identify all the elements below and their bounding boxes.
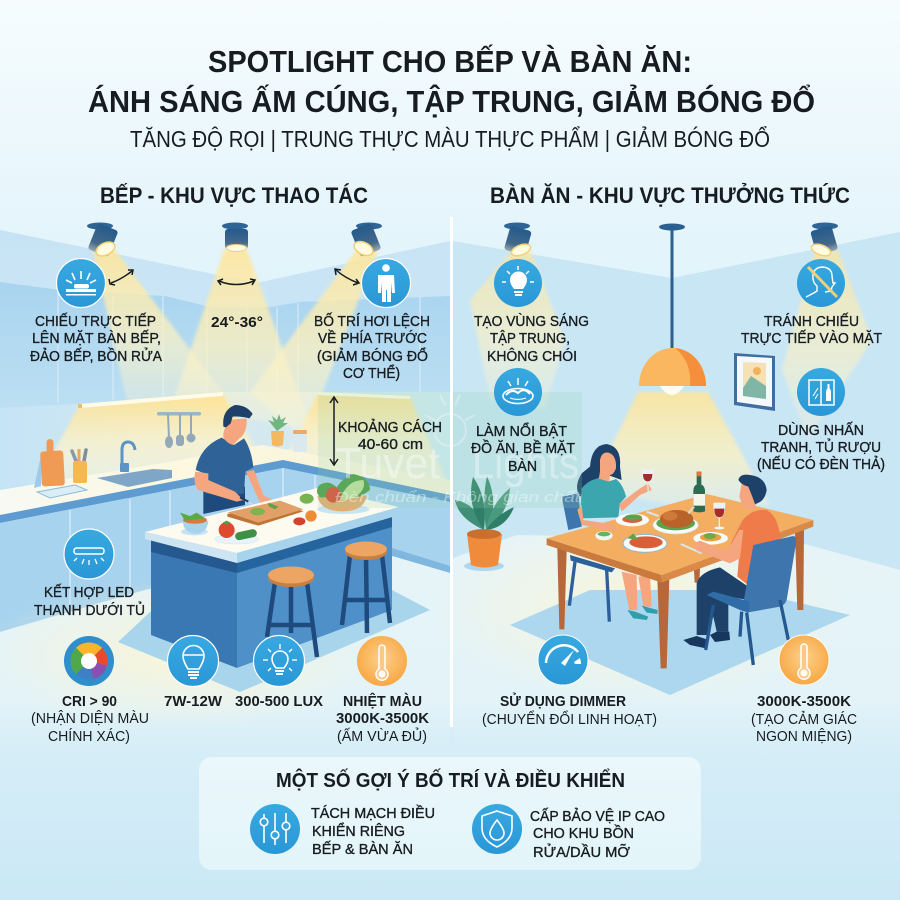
woman torso — [580, 478, 626, 518]
icon: wine cabinet — [797, 368, 845, 416]
man chair — [706, 536, 796, 665]
title — [88, 44, 815, 119]
back counter — [0, 445, 450, 632]
beam: right spot — [782, 250, 872, 440]
label: focused zone: KHÔNG CHÓI — [487, 348, 577, 365]
LED strip glow — [33, 394, 450, 490]
spotlight: kitchen center — [222, 222, 248, 252]
label: offset placement: BỐ TRÍ HƠI LỆCH — [314, 312, 430, 330]
label: colour temperature kitchen: NHIỆT MÀU — [343, 692, 422, 710]
watermark: Đèn chuẩn - Không gian chất — [335, 489, 581, 506]
man — [683, 475, 796, 665]
illustration: kitchen island rug — [118, 590, 430, 692]
sink and faucet — [97, 442, 172, 487]
plate with tomato and cucumber — [215, 534, 259, 544]
label: dimmer: SỬ DỤNG DIMMER — [500, 692, 626, 710]
heading: kitchen: BẾP - KHU VỰC THAO TÁC — [100, 183, 368, 208]
divider — [450, 217, 453, 727]
label: offset placement: (GIẢM BÓNG ĐỔ — [317, 347, 428, 365]
label: colour temperature dining: NGON MIỆNG) — [756, 728, 852, 745]
label: direct lighting: LÊN MẶT BÀN BẾP, — [32, 330, 161, 347]
label: offset placement — [314, 312, 430, 382]
tip text: separate circuits — [311, 805, 435, 858]
icon: sliders — [250, 804, 300, 854]
label: lux: 300-500 LUX — [235, 693, 323, 710]
label: colour temperature dining: 3000K-3500K — [757, 693, 851, 710]
spotlight: dining left — [504, 222, 532, 258]
woman arms and glass — [619, 469, 654, 512]
man head — [738, 475, 767, 510]
label: avoid face — [741, 313, 882, 347]
cutting board and utensils — [34, 439, 87, 498]
icon: water shield — [472, 804, 522, 854]
label: direct lighting: CHIẾU TRỰC TIẾP — [35, 313, 156, 330]
man pants — [697, 567, 751, 635]
arrow: center beam angle — [218, 279, 255, 285]
icon: person — [362, 258, 410, 308]
beam: left spot — [470, 250, 565, 410]
icon: color wheel — [64, 636, 114, 686]
label: focused zone: TẠO VÙNG SÁNG — [474, 313, 589, 330]
label: distance — [338, 419, 442, 453]
arrow: distance — [330, 397, 338, 465]
label: CRI: CRI > 90 — [62, 693, 117, 710]
arrow: left beam — [109, 270, 133, 285]
label: CRI: (NHẬN DIỆN MÀU — [31, 710, 149, 727]
watermark — [318, 392, 582, 508]
label: offset placement: CƠ THỂ) — [343, 364, 400, 382]
label: highlight food: BÀN — [508, 458, 537, 475]
man arm — [694, 530, 743, 563]
label: accent art: (NẾU CÓ ĐÈN THẢ) — [757, 456, 885, 473]
tip text: IP protection: RỬA/DẦU MỠ — [533, 843, 630, 861]
label: highlight food: LÀM NỔI BẬT — [476, 422, 567, 440]
LED strips — [78, 392, 410, 408]
icon: focus bulb — [494, 259, 542, 307]
spotlight: kitchen right — [351, 222, 382, 258]
icon: thermometer dining — [779, 635, 829, 685]
dining table — [547, 472, 813, 668]
pendant lamp — [639, 224, 706, 395]
stools — [267, 542, 390, 657]
label: distance: 40-60 cm — [358, 436, 423, 453]
label: wattage: 7W-12W — [164, 693, 223, 710]
label: colour temperature kitchen — [336, 692, 429, 745]
label: colour temperature kitchen: (ẤM VỪA ĐỦ) — [337, 727, 427, 745]
heading: dining: BÀN ĂN - KHU VỰC THƯỞNG THỨC — [490, 183, 850, 208]
icon: bulb watt — [168, 636, 218, 686]
picture frame — [734, 353, 775, 411]
illustration: dining room — [430, 232, 900, 765]
man torso — [730, 510, 780, 587]
label: colour temperature kitchen: 3000K-3500K — [336, 710, 429, 727]
panel heading: MỘT SỐ GỢI Ý BỐ TRÍ VÀ ĐIỀU KHIỂN — [276, 768, 625, 792]
dining rug — [510, 590, 850, 695]
small salad bowl — [181, 528, 208, 535]
vegetable bowl — [317, 505, 369, 514]
woman — [562, 444, 658, 622]
cook arms — [194, 472, 243, 502]
woman chair — [562, 493, 615, 622]
label: LED under cabinet: KẾT HỢP LED — [44, 584, 134, 601]
icon: no face glare — [797, 259, 845, 307]
icon: food highlight — [494, 368, 542, 416]
title: SPOTLIGHT CHO BẾP VÀ BÀN ĂN: — [208, 44, 692, 79]
panel: layout and control tips — [199, 757, 701, 870]
label: avoid face: TRỰC TIẾP VÀO MẶT — [741, 330, 882, 347]
tip text: separate circuits: KHIỂN RIÊNG — [312, 822, 405, 840]
illustration: cook — [194, 405, 278, 514]
label: colour temperature dining: (TẠO CẢM GIÁC — [751, 711, 857, 728]
cook head — [223, 405, 253, 445]
beam: pendant — [590, 392, 770, 510]
title: ÁNH SÁNG ẤM CÚNG, TẬP TRUNG, GIẢM BÓNG ĐỔ — [88, 83, 815, 119]
label: focused zone — [474, 313, 589, 365]
woman hand on table — [577, 505, 618, 530]
label: accent art — [757, 422, 885, 473]
tip text: separate circuits: BẾP & BÀN ĂN — [312, 841, 413, 858]
icon: under-cabinet LED — [64, 529, 114, 579]
cutting board — [227, 502, 303, 526]
tip text: separate circuits: TÁCH MẠCH ĐIỀU — [311, 805, 435, 822]
label: dimmer — [482, 692, 657, 728]
cook apron — [203, 487, 245, 514]
wine bottle — [693, 472, 705, 512]
icon: direct light on counter — [56, 258, 106, 308]
watermark: Tuvet — [335, 439, 440, 488]
label: avoid face: TRÁNH CHIẾU — [764, 313, 859, 330]
label: highlight food: ĐỒ ĂN, BỀ MẶT — [471, 439, 575, 457]
plant and jar on counter — [268, 414, 307, 452]
tip text: IP protection: CHO KHU BỒN — [533, 824, 634, 842]
tip text: IP protection — [530, 808, 665, 861]
subtitle: TĂNG ĐỘ RỌI | TRUNG THỰC MÀU THỰC PHẨM | GIẢM BÓNG ĐỔ — [130, 124, 770, 152]
spotlight: dining right — [810, 222, 838, 258]
plates and food — [595, 503, 728, 553]
floor — [0, 556, 450, 765]
woman legs — [622, 572, 652, 610]
illustration: island — [145, 488, 399, 668]
spotlight: kitchen left — [87, 222, 118, 259]
label: distance: KHOẢNG CÁCH — [338, 419, 442, 436]
label: beam angle: 24°-36° — [211, 314, 263, 331]
man shoes — [683, 632, 730, 648]
illustration: kitchen room — [0, 230, 450, 765]
cook shirt — [196, 438, 253, 495]
plant — [455, 476, 514, 571]
light beams: kitchen spotlights — [93, 248, 378, 440]
watermark: Lights — [472, 439, 579, 488]
vegetables right — [293, 517, 305, 525]
label: colour temperature dining — [751, 693, 857, 745]
label: offset placement: VỀ PHÍA TRƯỚC — [318, 330, 427, 347]
label: CRI: CHÍNH XÁC) — [48, 728, 130, 745]
label: accent art: DÙNG NHẤN — [778, 422, 864, 439]
label: focused zone: TẬP TRUNG, — [490, 330, 570, 347]
label: LED under cabinet: THANH DƯỚI TỦ — [34, 601, 145, 619]
label: direct lighting — [30, 313, 162, 365]
island food — [180, 474, 370, 544]
icon: thermometer — [357, 636, 407, 686]
utensil rack — [157, 412, 201, 447]
label: CRI — [31, 693, 149, 745]
woman face and neck — [598, 453, 616, 482]
woman hair — [577, 444, 622, 497]
icon: dimmer gauge — [538, 635, 588, 685]
label: highlight food — [471, 422, 575, 475]
label: LED under cabinet — [34, 584, 145, 619]
icon: bulb lux — [254, 636, 304, 686]
label: direct lighting: ĐẢO BẾP, BỒN RỬA — [30, 347, 162, 365]
label: dimmer: (CHUYỂN ĐỔI LINH HOẠT) — [482, 710, 657, 728]
label: accent art: TRANH, TỦ RƯỢU — [761, 438, 881, 456]
tip text: IP protection: CẤP BẢO VỆ IP CAO — [530, 808, 665, 825]
arrow: right beam — [335, 269, 359, 285]
